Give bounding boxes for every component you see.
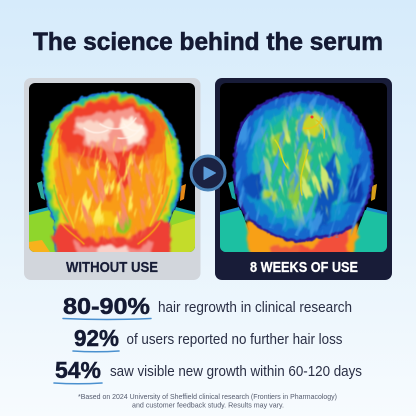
footnote [78, 392, 337, 410]
stat: 54% new growth [54, 357, 362, 384]
icon: play arrow button [191, 156, 225, 190]
stat: 92% no further loss [73, 325, 342, 352]
stat: 92% no further loss: 92% [74, 325, 119, 351]
neck [244, 220, 361, 252]
label: 8 weeks of use: 8 WEEKS OF USE [250, 259, 358, 276]
thermal image: head after [220, 83, 387, 252]
title: The science behind the serum [33, 28, 383, 56]
stat: 80-90% hair regrowth [63, 293, 352, 320]
hair strands at the flanks [50, 106, 173, 244]
footnote: *Based on 2024 University of Sheffield clinical research (Frontiers in Pharmacology) [78, 392, 337, 401]
panel: 8 weeks of use [215, 78, 392, 280]
stat: 54% new growth: 54% [55, 357, 101, 383]
stat: 80-90% hair regrowth: 80-90% [63, 293, 150, 319]
stat: 80-90% hair regrowth: hair regrowth in clinical research [158, 300, 352, 316]
crown white strands [84, 118, 142, 138]
thermal image: head before [29, 83, 195, 252]
card background [215, 78, 392, 280]
card background [24, 78, 200, 280]
stat: 92% no further loss: of users reported no further hair loss [126, 332, 342, 348]
hair texture: flecks [235, 93, 372, 238]
label: without use: WITHOUT USE [66, 259, 158, 276]
stat: 54% new growth: saw visible new growth within 60-120 days [110, 364, 362, 380]
hair texture: flecks [56, 137, 168, 243]
footnote: and customer feedback study. Results may vary. [132, 400, 284, 410]
hot spot at crown [275, 116, 325, 195]
panel: without use [24, 78, 200, 280]
